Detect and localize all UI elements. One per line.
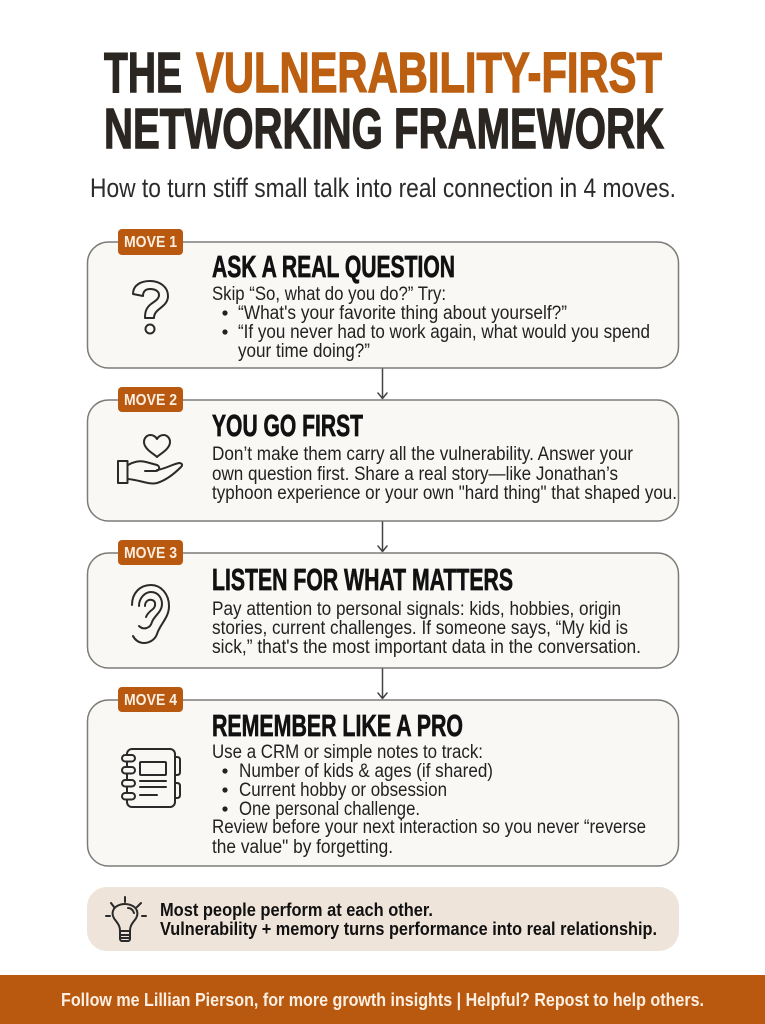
icon: light bulb xyxy=(106,897,146,941)
subtitle: How to turn stiff small talk into real connection in 4 moves. xyxy=(90,173,676,203)
badge: move 3: MOVE 3 xyxy=(124,545,177,562)
arrow: move 1 to 2 xyxy=(378,369,387,398)
panel: move 3 xyxy=(88,540,678,668)
heading: remember like a pro: REMEMBER LIKE A PRO xyxy=(212,708,463,743)
heading: ask a real question: ASK A REAL QUESTION xyxy=(212,249,455,284)
badge: move 3 xyxy=(118,540,183,565)
arrow: move 2 to 3 xyxy=(378,522,387,552)
body text: move 1: “If you never had to work again, what would you spend xyxy=(238,322,650,343)
body text: move 4: the value" by forgetting. xyxy=(212,837,393,858)
body text: move 4 xyxy=(212,742,646,858)
badge: move 1 xyxy=(118,229,183,255)
body text: move 4: Current hobby or obsession xyxy=(239,780,447,801)
title xyxy=(104,41,664,161)
callout text xyxy=(160,899,657,939)
body text: move 4: One personal challenge. xyxy=(239,799,420,820)
badge: move 2: MOVE 2 xyxy=(124,392,177,409)
callout text: Most people perform at each other. xyxy=(160,899,433,920)
badge: move 2 xyxy=(118,387,183,412)
body text: move 3: stories, current challenges. If someone says, “My kid is xyxy=(212,618,628,639)
body text: move 3: Pay attention to personal signals: kids, hobbies, origin xyxy=(212,599,621,620)
panel: move 4 xyxy=(88,687,678,866)
body text: move 4: Use a CRM or simple notes to track: xyxy=(212,742,483,763)
badge: move 1: MOVE 1 xyxy=(124,234,177,251)
icon: hand holding heart xyxy=(118,435,182,483)
arrow: move 3 to 4 xyxy=(378,669,387,698)
panel: move 2 xyxy=(88,387,678,521)
icon: ear xyxy=(132,585,169,643)
body text: move 1 xyxy=(212,284,650,362)
callout: key takeaway xyxy=(87,887,679,951)
badge: move 4 xyxy=(118,687,183,712)
heading: you go first: YOU GO FIRST xyxy=(212,408,363,443)
body text: move 2: Don’t make them carry all the vulnerability. Answer your xyxy=(212,444,634,465)
footer banner xyxy=(0,975,765,1024)
icon: question mark xyxy=(133,281,168,334)
body text: move 1: “What's your favorite thing about yourself?” xyxy=(238,303,567,324)
panel: move 1 xyxy=(88,229,678,368)
icon: notebook xyxy=(122,749,180,807)
body text: move 1: your time doing?” xyxy=(238,341,370,362)
body text: move 4: Review before your next interaction so you never “reverse xyxy=(212,817,646,838)
heading: listen for what matters: LISTEN FOR WHAT MATTERS xyxy=(212,562,513,597)
body text: move 2: own question first. Share a real story—like Jonathan’s xyxy=(212,464,618,485)
body text: move 2: typhoon experience or your own "hard thing" that shaped you. xyxy=(212,483,677,504)
badge: move 4: MOVE 4 xyxy=(124,692,177,709)
body text: move 3: sick,” that's the most important data in the conversation. xyxy=(212,637,641,658)
body text: move 3 xyxy=(212,599,641,658)
body text: move 4: Number of kids & ages (if shared) xyxy=(239,761,493,782)
title: THE xyxy=(104,41,182,105)
body text: move 1: Skip “So, what do you do?” Try: xyxy=(212,284,446,305)
callout text: Vulnerability + memory turns performance into real relationship. xyxy=(160,918,657,939)
body text: move 2 xyxy=(212,444,677,504)
